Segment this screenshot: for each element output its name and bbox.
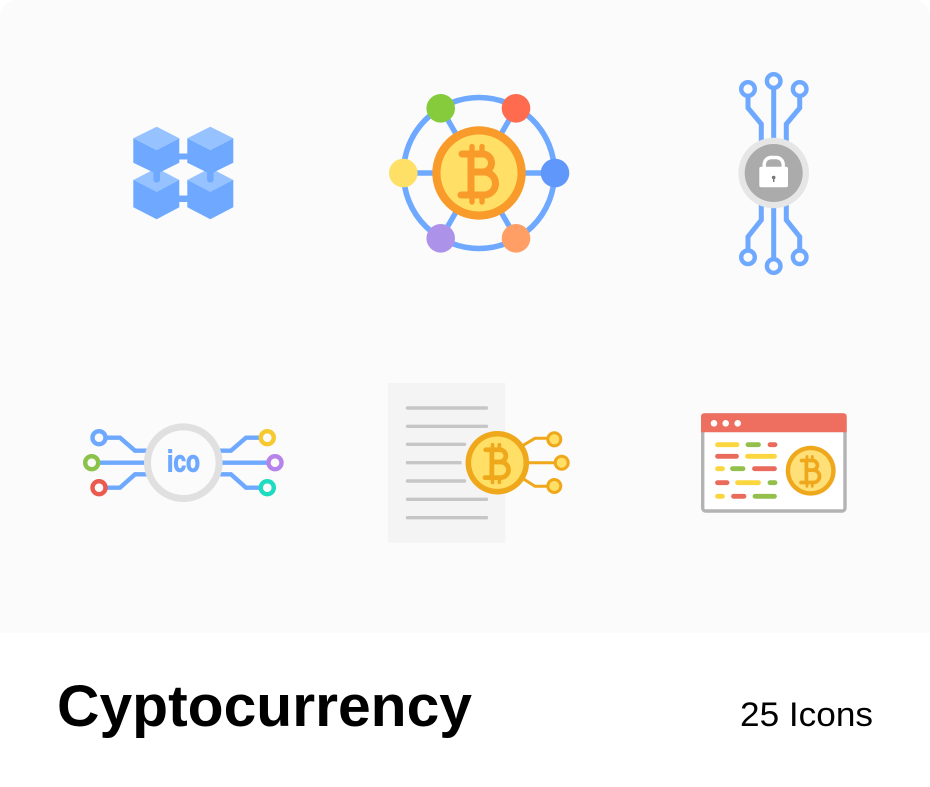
ico label: ico [167, 444, 200, 478]
top right cube [187, 127, 233, 182]
icon: ICO circuit [85, 427, 282, 499]
bottom right cube [187, 168, 233, 219]
icon: circuit padlock [738, 74, 809, 273]
code lines [718, 445, 775, 496]
network nodes [389, 94, 569, 253]
bitcoin coin [466, 431, 529, 494]
browser title bar [701, 413, 847, 432]
icon: browser window with code and bitcoin [701, 413, 847, 511]
icon: blockchain cubes [133, 127, 233, 219]
bitcoin coin [786, 446, 836, 496]
icon: bitcoin whitepaper [388, 383, 568, 543]
document page [388, 383, 505, 543]
title: Cyptocurrency [57, 674, 472, 739]
icon: bitcoin network [389, 94, 569, 253]
padlock [759, 157, 788, 187]
bottom left cube [133, 168, 179, 219]
bitcoin coin [432, 126, 526, 220]
top left cube [133, 127, 179, 182]
document text lines [408, 408, 486, 518]
window dots [711, 420, 741, 427]
icon count: 25 Icons [740, 696, 873, 734]
